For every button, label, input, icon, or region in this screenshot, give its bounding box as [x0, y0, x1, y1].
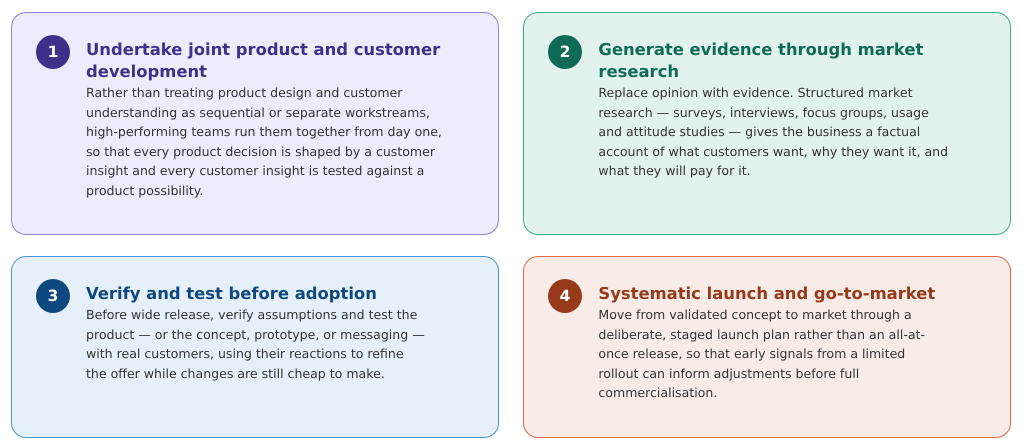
body text 3: with real customers, using their reactions to refine [86, 346, 404, 361]
body text 1: so that every product decision is shaped by a customer [86, 144, 435, 159]
heading 1 [86, 40, 440, 80]
number badge 3: 3 [48, 286, 58, 304]
heading 1: Undertake joint product and customer [86, 40, 440, 58]
body text 2: Replace opinion with evidence. Structured market [598, 85, 913, 100]
panel: step 3 [11, 256, 499, 438]
heading 2: research [598, 62, 679, 80]
heading 2 [598, 40, 923, 80]
body text 3: Before wide release, verify assumptions and test the [86, 307, 417, 322]
body text 3: the offer while changes are still cheap to make. [86, 366, 385, 381]
body text 4: once release, so that early signals from a limited [598, 346, 905, 361]
number badge 3 [36, 278, 70, 312]
body text 2: account of what customers want, why they want it, and [598, 144, 948, 159]
body text 3 [86, 307, 425, 381]
body text 1: understanding as sequential or separate workstreams, [86, 105, 430, 120]
body text 1: insight and every customer insight is tested against a [86, 163, 424, 178]
body text 3: product — or the concept, prototype, or messaging — [86, 327, 425, 342]
body text 4: rollout can inform adjustments before full [598, 366, 859, 381]
number badge 2: 2 [560, 42, 570, 60]
heading 2: Generate evidence through market [598, 40, 923, 58]
body text 1: high-performing teams run them together from day one, [86, 124, 442, 139]
body text 2: what they will pay for it. [598, 163, 751, 178]
number badge 1 [36, 34, 70, 68]
body text 1 [86, 85, 442, 198]
panel: step 1 [11, 12, 499, 235]
body text 4: commercialisation. [598, 385, 717, 400]
body text 2: research — surveys, interviews, focus groups, usage [598, 105, 929, 120]
heading 3: Verify and test before adoption [86, 284, 377, 302]
panel: step 4 [523, 256, 1011, 438]
heading 1: development [86, 62, 207, 80]
body text 4 [598, 307, 925, 400]
number badge 4 [548, 278, 582, 312]
heading 4: Systematic launch and go-to-market [598, 284, 935, 302]
number badge 1: 1 [48, 42, 58, 60]
body text 4: deliberate, staged launch plan rather than an all-at- [598, 327, 925, 342]
number badge 2 [548, 34, 582, 68]
body text 2: and attitude studies — gives the business a factual [598, 124, 920, 139]
body text 4: Move from validated concept to market through a [598, 307, 912, 322]
body text 1: Rather than treating product design and customer [86, 85, 402, 100]
body text 2 [598, 85, 948, 178]
panel: step 2 [523, 12, 1011, 235]
body text 1: product possibility. [86, 183, 203, 198]
number badge 4: 4 [560, 286, 570, 304]
